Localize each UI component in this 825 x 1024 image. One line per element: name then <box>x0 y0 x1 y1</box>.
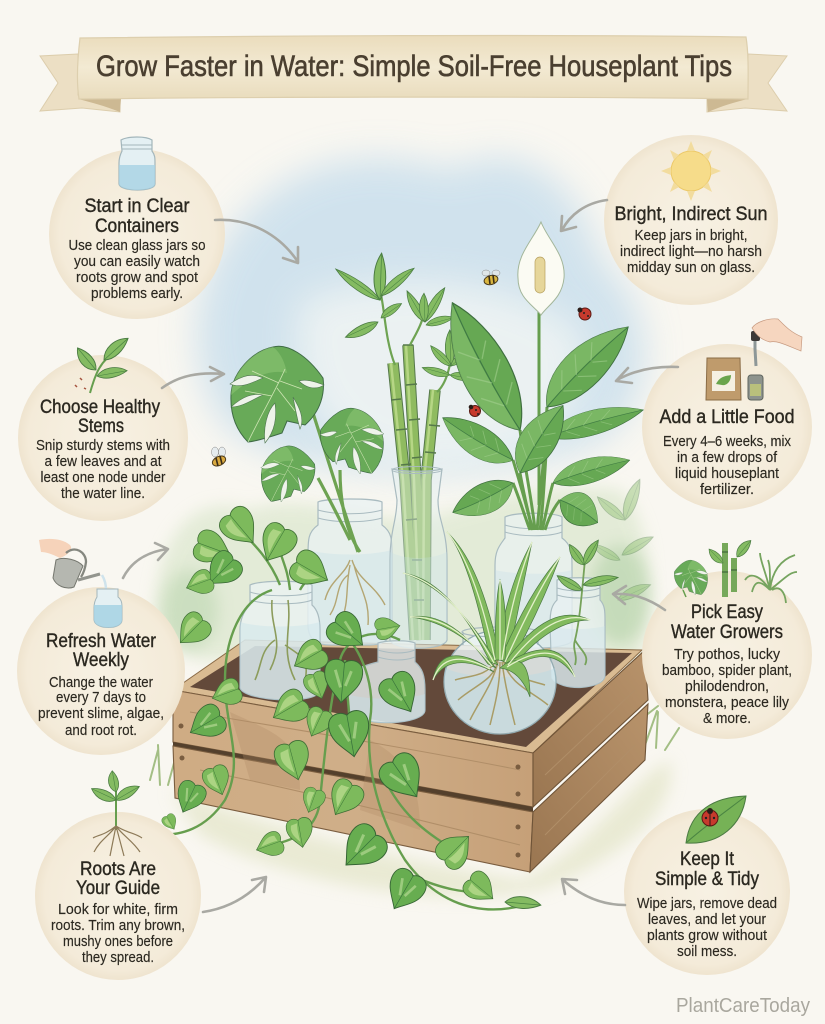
arrow 3 <box>162 367 224 388</box>
jar with monstera roots <box>308 499 392 645</box>
bee upper <box>482 270 500 286</box>
tip: Pick Easy Water Growers: bamboo, spider plant, <box>662 663 792 679</box>
glass vase <box>390 466 447 648</box>
tip: Pick Easy Water Growers: Water Growers <box>671 621 783 643</box>
tip: Roots Are Your Guide: Look for white, firm <box>58 902 178 918</box>
tip: Start in Clear Containers: Containers <box>95 215 179 237</box>
tip: Refresh Water Weekly <box>17 539 185 755</box>
tip: Start in Clear Containers: Use clean glass jars so <box>68 238 206 254</box>
icon: fertilizer bag, bottle and hand <box>706 319 802 400</box>
tip: Keep It Simple & Tidy: Wipe jars, remove dead <box>637 896 777 912</box>
small middle jar <box>347 641 425 723</box>
peace lily jar <box>495 513 572 648</box>
tip: Roots Are Your Guide: Your Guide <box>76 877 160 899</box>
peace lily plant <box>428 222 646 535</box>
small right jar with cutting <box>550 538 619 687</box>
tip: Start in Clear Containers: roots grow and spot <box>76 270 198 286</box>
tip: Choose Healthy Stems: least one node under <box>40 470 166 486</box>
arrows <box>123 200 678 912</box>
tip: Keep It Simple & Tidy: plants grow without <box>647 928 767 944</box>
tip: Roots Are Your Guide: roots. Trim any brown, <box>51 918 185 934</box>
tip: Keep It Simple & Tidy: soil mess. <box>677 944 737 960</box>
wooden crate <box>173 640 648 872</box>
ground wash and grass <box>150 706 679 896</box>
tip: Keep It Simple & Tidy: Simple & Tidy <box>655 868 759 890</box>
spider plant in round bowl <box>403 532 590 734</box>
tip: Start in Clear Containers: you can easily watch <box>74 254 200 270</box>
tip: Pick Easy Water Growers: philodendron, <box>685 679 769 695</box>
tip: Pick Easy Water Growers: Try pothos, lucky <box>674 647 781 663</box>
arrow 7 <box>203 877 266 912</box>
tip: Choose Healthy Stems <box>18 333 188 521</box>
tip: Choose Healthy Stems: a few leaves and at <box>44 454 162 470</box>
insects <box>211 270 591 468</box>
icon: sprout with roots <box>89 770 142 856</box>
ladybug upper <box>578 308 591 320</box>
tip: Roots Are Your Guide: Roots Are <box>80 858 156 880</box>
title text: Grow Faster in Water: Simple Soil-Free Houseplant Tips <box>96 50 732 83</box>
background foliage wash <box>155 477 655 660</box>
lucky bamboo <box>333 253 476 640</box>
icon: watering can, hand and jar <box>39 539 122 628</box>
tip: Pick Easy Water Growers: monstera, peace lily <box>665 695 790 711</box>
tip: Add a Little Food: Add a Little Food <box>660 406 794 428</box>
icon: sun <box>661 141 721 201</box>
tip: Bright, Indirect Sun: indirect light—no harsh <box>620 244 762 260</box>
arrow 1 <box>215 220 298 263</box>
tip: Add a Little Food: liquid houseplant <box>675 466 779 482</box>
tip: Bright, Indirect Sun <box>604 135 778 305</box>
tip: Refresh Water Weekly: Change the water <box>49 675 153 691</box>
left jar with pothos roots <box>240 581 320 700</box>
tip: Start in Clear Containers: problems early. <box>91 286 183 302</box>
tip: Start in Clear Containers: Start in Clear <box>84 195 190 217</box>
arrow 5 <box>123 543 168 578</box>
arrow 8 <box>562 879 625 905</box>
arrow 2 <box>561 200 607 231</box>
tip: Choose Healthy Stems: Snip sturdy stems with <box>36 438 170 454</box>
title banner <box>40 35 787 112</box>
tip: Pick Easy Water Growers: Pick Easy <box>691 601 763 623</box>
tip: Add a Little Food: in a few drops of <box>677 450 778 466</box>
icon: three easy plants <box>674 537 797 603</box>
ladybug on leaf <box>469 405 480 416</box>
tip: Refresh Water Weekly: Refresh Water <box>46 630 156 652</box>
tip: Add a Little Food: fertilizer. <box>700 482 754 498</box>
arrow 6 <box>613 586 665 610</box>
tip: Roots Are Your Guide: mushy ones before <box>63 934 173 950</box>
tip: Bright, Indirect Sun: Bright, Indirect Sun <box>614 203 768 225</box>
tip: Refresh Water Weekly: prevent slime, algae, <box>38 706 164 722</box>
tip: Bright, Indirect Sun: midday sun on glass. <box>627 260 755 276</box>
tip: Pick Easy Water Growers <box>642 537 812 739</box>
tip: Roots Are Your Guide <box>35 770 201 980</box>
tip: Keep It Simple & Tidy: Keep It <box>680 848 735 870</box>
watermark: PlantCareToday <box>676 995 810 1017</box>
tip: Refresh Water Weekly: Weekly <box>73 649 129 671</box>
arrow 4 <box>616 367 678 383</box>
icon: glass jar <box>119 137 155 190</box>
peace lily flower <box>518 222 564 315</box>
icon: leaf with ladybug <box>686 796 746 843</box>
bee left <box>211 447 227 468</box>
tip: Start in Clear Containers <box>49 137 225 319</box>
tip: Keep It Simple & Tidy: leaves, and let your <box>648 912 766 928</box>
tip: Choose Healthy Stems: Choose Healthy <box>40 396 160 418</box>
tip: Refresh Water Weekly: every 7 days to <box>56 690 146 706</box>
tip: Choose Healthy Stems: Stems <box>78 415 124 437</box>
tip: Keep It Simple & Tidy <box>624 796 790 975</box>
pothos vines and leaves <box>160 502 541 918</box>
tip: Add a Little Food <box>642 319 812 510</box>
tip: Bright, Indirect Sun: Keep jars in bright, <box>634 228 748 244</box>
icon: sprig <box>72 333 131 393</box>
tip: Add a Little Food: Every 4–6 weeks, mix <box>663 434 792 450</box>
tip: Roots Are Your Guide: they spread. <box>82 950 154 966</box>
tip: Pick Easy Water Growers: & more. <box>703 711 751 727</box>
monstera plant <box>230 346 384 552</box>
tip: Refresh Water Weekly: and root rot. <box>65 723 137 739</box>
tip: Choose Healthy Stems: the water line. <box>61 486 145 502</box>
